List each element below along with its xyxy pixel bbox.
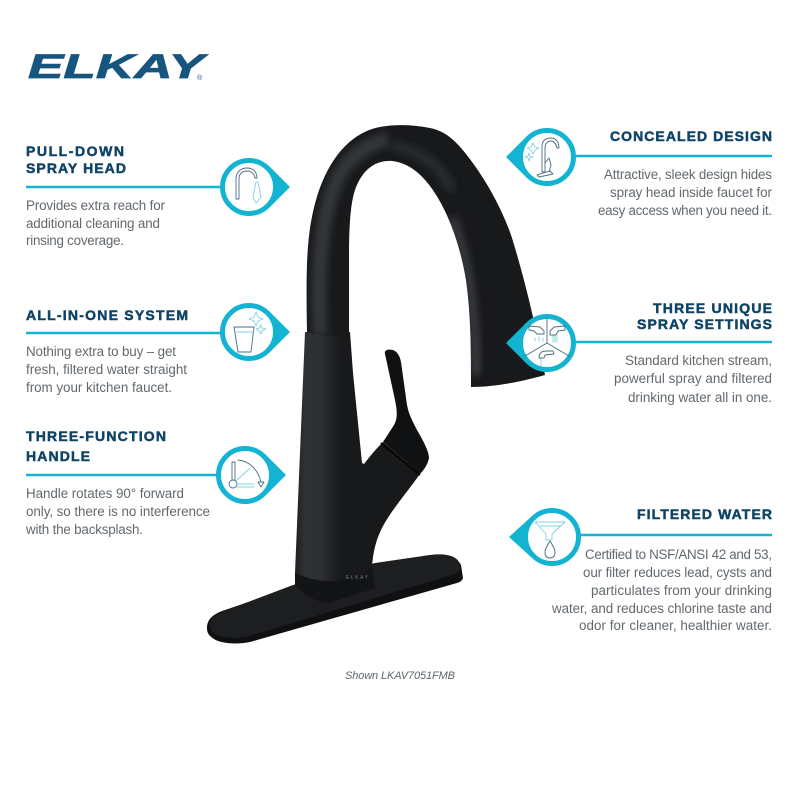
text block: from your kitchen faucet.: [26, 380, 172, 395]
faucet: logo mark: ELKAY: [346, 575, 369, 581]
text block: odor for cleaner, healthier water.: [579, 618, 772, 633]
panel: filtered water: [509, 506, 772, 633]
text block: Handle rotates 90° forward: [26, 486, 184, 501]
panel: pull-down spray head: [26, 143, 290, 248]
faucet product image: [207, 120, 550, 643]
icon: faucet with sparkles: [506, 130, 574, 184]
heading: FILTERED WATER: [637, 506, 772, 522]
heading: SPRAY HEAD: [26, 160, 126, 176]
text block: Certified to NSF/ANSI 42 and 53,: [585, 547, 772, 562]
heading: THREE UNIQUE: [653, 300, 772, 316]
text block: spray head inside faucet for: [610, 185, 773, 200]
caption: Shown LKAV7051FMB: [345, 670, 455, 682]
heading: [26, 428, 166, 464]
text block: with the backsplash.: [25, 522, 143, 537]
rule: [26, 186, 222, 188]
icon: three spray modes: [506, 316, 574, 370]
heading: [26, 143, 126, 176]
text block: [614, 353, 772, 405]
heading: CONCEALED DESIGN: [610, 128, 772, 144]
icon: filter funnel and drop: [509, 510, 578, 564]
faucet: handle collar seam: [381, 443, 420, 475]
text block: powerful spray and filtered: [614, 371, 772, 386]
text block: additional cleaning and: [26, 216, 160, 231]
heading: [637, 300, 772, 332]
panel: three unique spray settings: [506, 300, 772, 405]
rule: [26, 332, 222, 334]
logo: Elkay: ELKAY: [28, 48, 209, 86]
icon: handle rotation arc: [218, 448, 286, 502]
text block: [25, 486, 210, 537]
rule: [576, 155, 772, 157]
panel: three-function handle: [25, 428, 286, 537]
faucet: handle lever and cap: [383, 350, 429, 474]
heading: THREE-FUNCTION: [26, 428, 166, 444]
rule: [576, 341, 772, 343]
heading: HANDLE: [26, 448, 90, 464]
text block: Standard kitchen stream,: [625, 353, 772, 368]
icon: glass with sparkles: [222, 306, 290, 358]
rule: [26, 474, 217, 476]
panel: concealed design: [506, 128, 773, 218]
rule: [580, 534, 772, 536]
heading: ALL-IN-ONE SYSTEM: [26, 307, 188, 323]
text block: particulates from your drinking: [591, 583, 772, 598]
heading: SPRAY SETTINGS: [637, 316, 772, 332]
text block: [26, 344, 187, 395]
heading: PULL-DOWN: [26, 143, 124, 159]
text block: Nothing extra to buy – get: [26, 344, 176, 359]
text block: only, so there is no interference: [26, 504, 210, 519]
faucet: deck plate: [207, 556, 463, 643]
faucet: body and base: [295, 332, 420, 603]
text block: easy access when you need it.: [598, 203, 772, 218]
text block: drinking water all in one.: [628, 390, 772, 405]
text block: [26, 198, 166, 248]
text block: fresh, filtered water straight: [26, 362, 187, 377]
text block: Provides extra reach for: [26, 198, 166, 213]
text block: [551, 547, 772, 633]
text block: our filter reduces lead, cysts and: [583, 565, 772, 580]
text block: rinsing coverage.: [26, 233, 124, 248]
icon: faucet spray head: [222, 160, 290, 214]
logo: Elkay: [28, 48, 209, 86]
text block: water, and reduces chlorine taste and: [551, 601, 772, 616]
faucet: spout: [300, 120, 550, 390]
text block: Attractive, sleek design hides: [604, 167, 772, 182]
text block: [598, 167, 773, 218]
panel: all-in-one system: [26, 306, 290, 395]
logo: Elkay: ®: [197, 74, 203, 82]
faucet: base collar: [295, 567, 375, 603]
